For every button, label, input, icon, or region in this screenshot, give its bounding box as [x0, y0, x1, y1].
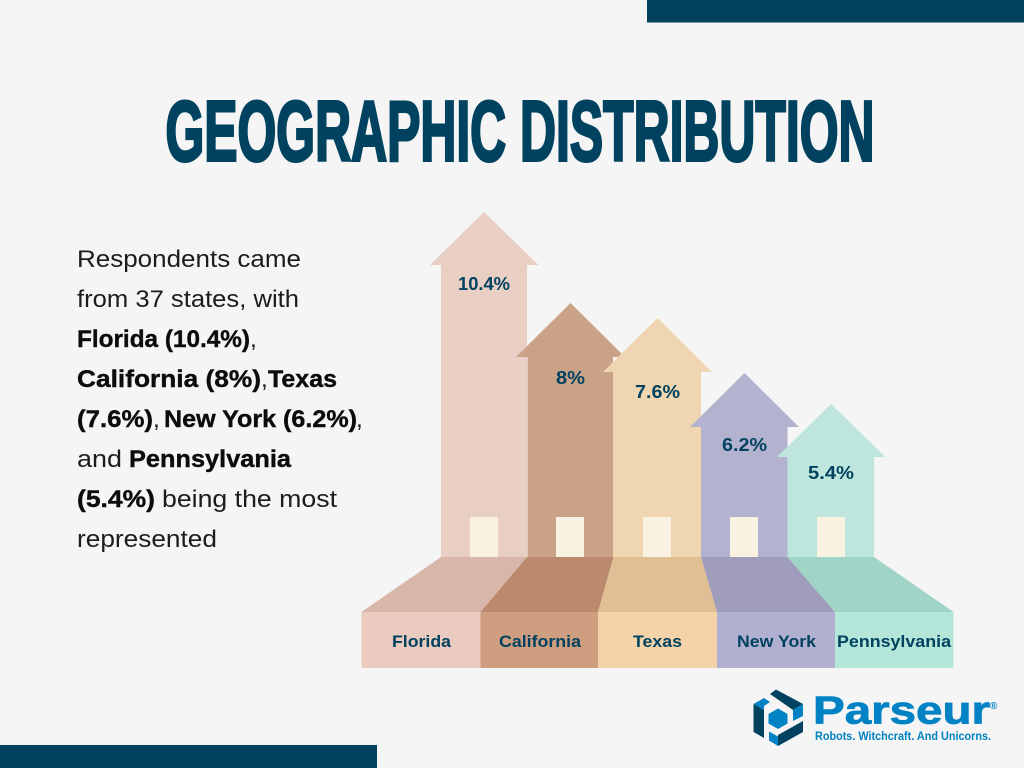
label: Florida: Florida [392, 632, 452, 651]
body text [77, 246, 363, 553]
label: Texas [598, 612, 717, 668]
body text: Respondents came [77, 246, 301, 273]
arrow: Texas 7.6% [603, 318, 712, 557]
registered mark: ® [990, 701, 998, 712]
label: Pennsylvania [835, 612, 954, 668]
body text: represented [77, 526, 217, 553]
arrow: Texas 7.6%: 7.6% [635, 381, 680, 402]
arrow: California 8%: 8% [556, 367, 585, 388]
body text: , [261, 366, 268, 393]
label: Pennsylvania: Pennsylvania [837, 632, 952, 651]
body text: Pennsylvania [129, 446, 291, 473]
body text: , [250, 326, 257, 353]
body text: , [356, 406, 363, 433]
body text: Florida (10.4%) [77, 326, 250, 353]
arrow: New York 6.2%: 6.2% [722, 434, 767, 455]
arrow: Pennsylvania 5.4% [777, 404, 886, 557]
perspective floor [362, 557, 954, 612]
arrow: New York 6.2% [690, 373, 799, 557]
top accent bar [647, 0, 1024, 22]
body text: and [77, 446, 122, 473]
logo: Parseur [754, 690, 998, 746]
body text: being the most [162, 486, 337, 513]
body text: , [153, 406, 160, 433]
body text: California (8%) [77, 366, 261, 393]
bottom accent bar [0, 745, 377, 768]
body text: from 37 states, with [77, 286, 299, 313]
body text: New York (6.2%) [164, 406, 357, 433]
label: Florida [362, 612, 480, 668]
body text: (7.6%) [77, 406, 153, 433]
wordmark: Parseur [813, 690, 990, 732]
arrow: Florida 10.4%: 10.4% [458, 273, 510, 294]
arrow: Pennsylvania 5.4%: 5.4% [808, 462, 854, 483]
icon: hexagon mark [754, 690, 803, 746]
label: California: California [499, 632, 582, 651]
body text: Texas [268, 366, 337, 393]
label: New York: New York [737, 632, 817, 651]
label: Texas: Texas [633, 632, 682, 651]
body text: (5.4%) [77, 486, 155, 513]
arrow: Florida 10.4% [430, 212, 538, 557]
arrow: California 8% [516, 303, 625, 557]
label: New York [717, 612, 835, 668]
tagline: Robots. Witchcraft. And Unicorns. [815, 729, 991, 743]
label: California [480, 612, 598, 668]
